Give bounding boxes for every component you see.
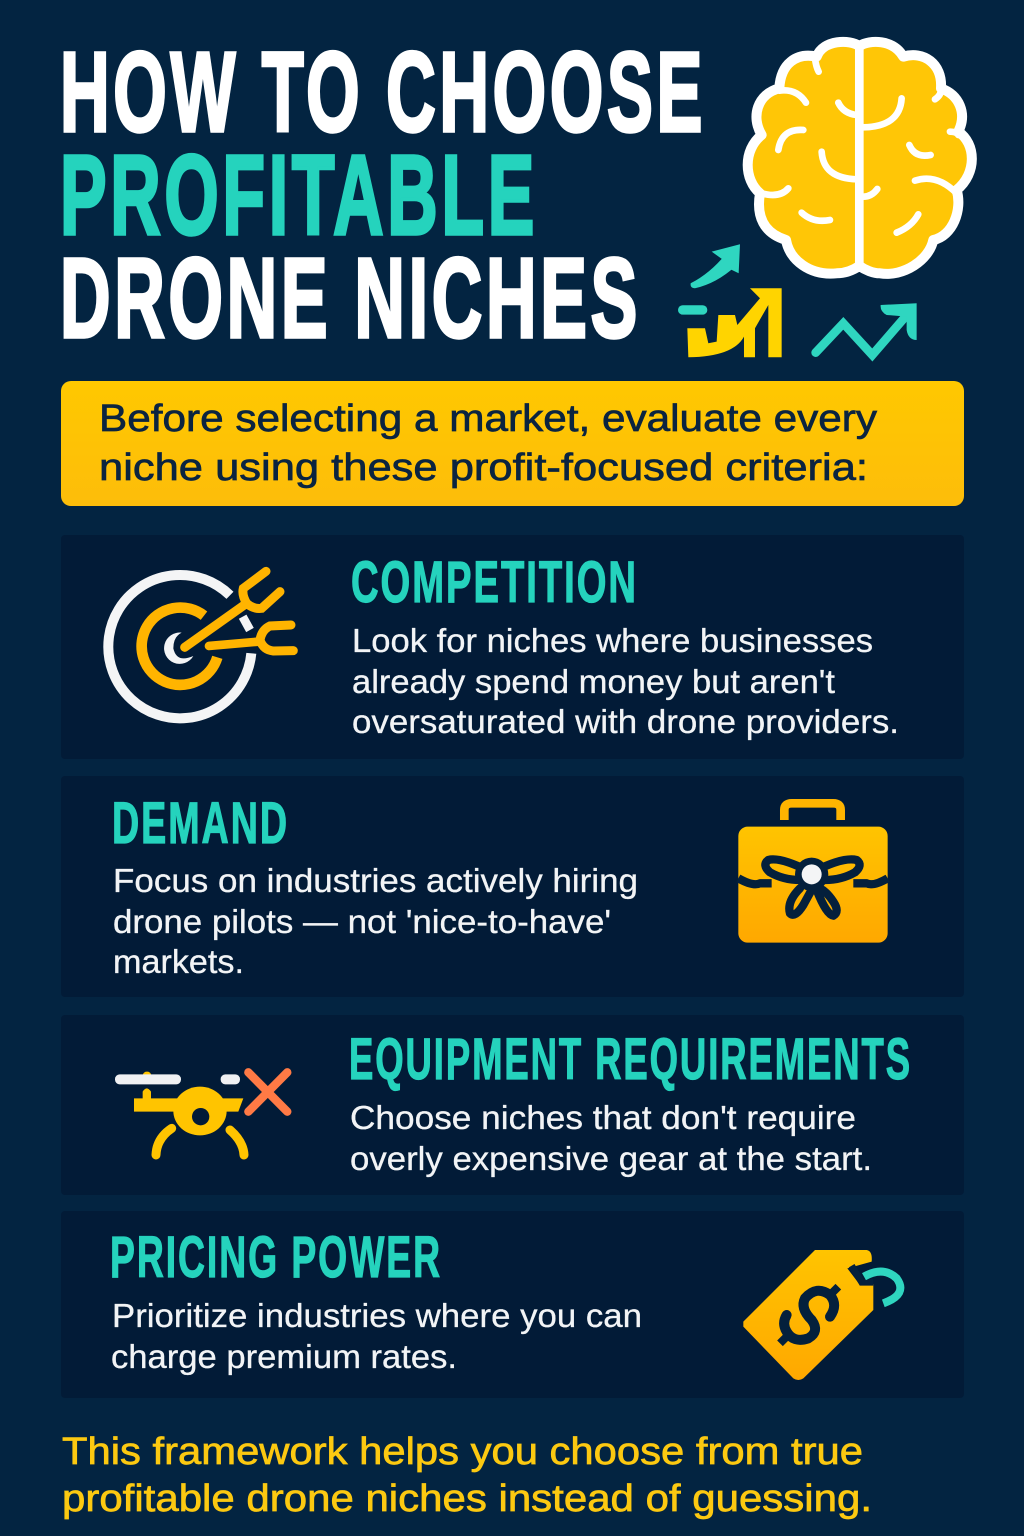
text: equipment requirements [350, 1099, 872, 1177]
footer statement: This framework helps you choose from true [62, 1431, 863, 1473]
text: demand [113, 862, 638, 980]
title: PROFITABLE [60, 132, 538, 258]
footer statement [62, 1431, 872, 1520]
text: competition: already spend money but aren't [352, 663, 835, 700]
panel: demand [61, 776, 964, 997]
text: demand: Focus on industries actively hiring [113, 862, 638, 899]
title [60, 29, 706, 361]
title: DRONE NICHES [60, 235, 641, 361]
text: pricing power [111, 1297, 642, 1375]
panel: competition [61, 535, 964, 759]
icon: drone with cross [115, 1072, 287, 1155]
panel: equipment requirements [61, 1015, 964, 1195]
banner: Before selecting a market, evaluate every [99, 398, 877, 440]
text: competition [352, 622, 899, 740]
text: competition: oversaturated with drone providers. [352, 703, 899, 740]
banner [61, 381, 964, 506]
icon: brain [748, 42, 972, 274]
text: demand: drone pilots — not 'nice-to-have' [113, 903, 611, 940]
icon: growth arrows [683, 244, 917, 357]
banner: niche using these profit-focused criteria: [99, 447, 868, 489]
text: equipment requirements: overly expensive gear at the start. [350, 1140, 872, 1177]
panel: pricing power [61, 1211, 964, 1398]
icon: price tag [743, 1250, 900, 1380]
icon: target with darts [108, 571, 293, 718]
text: competition: Look for niches where businesses [352, 622, 873, 659]
text: demand: markets. [113, 943, 244, 980]
footer statement: profitable drone niches instead of guessing. [62, 1478, 872, 1520]
heading: demand: DEMAND [112, 791, 289, 856]
icon: briefcase with drone [738, 803, 888, 943]
text: equipment requirements: Choose niches that don't require [350, 1099, 856, 1136]
heading: competition: COMPETITION [351, 550, 638, 615]
heading: pricing power: PRICING POWER [110, 1225, 442, 1290]
text: pricing power: charge premium rates. [111, 1338, 457, 1375]
text: pricing power: Prioritize industries where you can [112, 1297, 642, 1334]
